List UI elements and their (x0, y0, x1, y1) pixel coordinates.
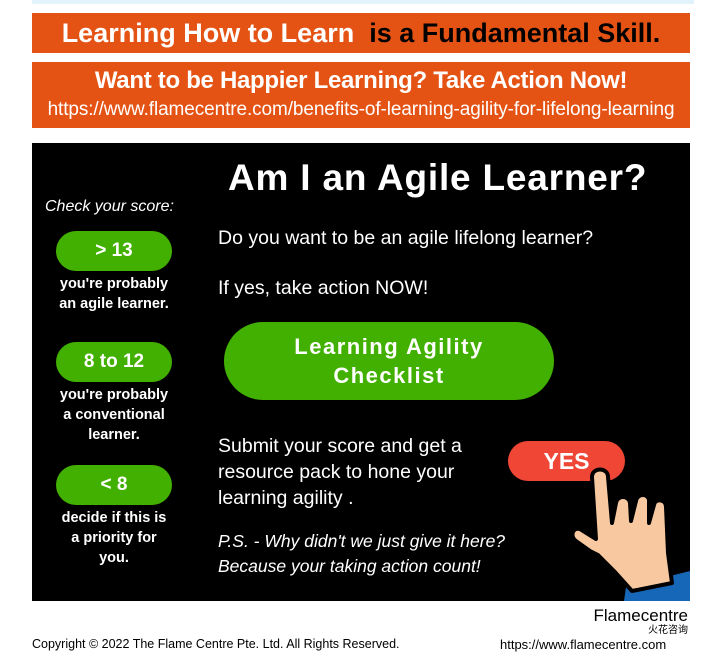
score: >13: > 13 (95, 240, 133, 261)
panel: main black (32, 143, 690, 601)
score: 8 to 12: 8 to 12 (84, 351, 144, 372)
score: >13 (56, 231, 172, 312)
checklist button (224, 322, 554, 400)
icon: pointing hand (574, 468, 690, 601)
logo (594, 606, 688, 636)
score: 8 to 12 (56, 342, 172, 443)
score label: Check your score: (45, 198, 174, 215)
banner: headline (32, 13, 690, 53)
submit text: Submit your score and get a (218, 435, 462, 457)
score: 8 to 12: a conventional (63, 407, 165, 423)
logo: Flamecentre (594, 606, 688, 625)
yes button (508, 441, 625, 481)
footer copyright: Copyright © 2022 The Flame Centre Pte. Ltd. All Rights Reserved. (32, 637, 400, 651)
PS text: Because your taking action count! (218, 556, 481, 576)
logo: 火花咨询 (648, 621, 688, 636)
banner: call to action: Want to be Happier Learning? Take Action Now! (95, 67, 627, 94)
score: <8: you. (99, 550, 129, 566)
checklist button: Checklist (333, 363, 445, 388)
title: Am I an Agile Learner? (228, 157, 647, 198)
footer url: https://www.flamecentre.com (500, 637, 666, 652)
score: <8: a priority for (71, 530, 157, 546)
banner: headline: Learning How to Learn is a Fundamental Skill. (62, 18, 660, 48)
yes button: YES (543, 448, 590, 474)
score: <8: < 8 (101, 474, 127, 495)
PS text (218, 531, 505, 576)
banner: call to action (32, 62, 690, 128)
score: <8 (56, 465, 172, 566)
score: >13: you're probably (60, 276, 168, 292)
score: 8 to 12: learner. (88, 427, 140, 443)
PS text: P.S. - Why didn't we just give it here? (218, 531, 505, 551)
score: 8 to 12: you're probably (60, 387, 168, 403)
checklist button: Learning Agility (294, 334, 484, 359)
action text: If yes, take action NOW! (218, 277, 428, 299)
question text: Do you want to be an agile lifelong learner? (218, 227, 593, 249)
submit text: resource pack to hone your (218, 461, 454, 483)
top strip (32, 0, 694, 4)
banner: call to action: https://www.flamecentre.com/benefits-of-learning-agility-for-lifelong-learning (48, 99, 674, 120)
submit text: learning agility . (218, 487, 354, 509)
submit text (218, 435, 462, 509)
score: >13: an agile learner. (59, 296, 169, 312)
score: <8: decide if this is (62, 510, 166, 526)
